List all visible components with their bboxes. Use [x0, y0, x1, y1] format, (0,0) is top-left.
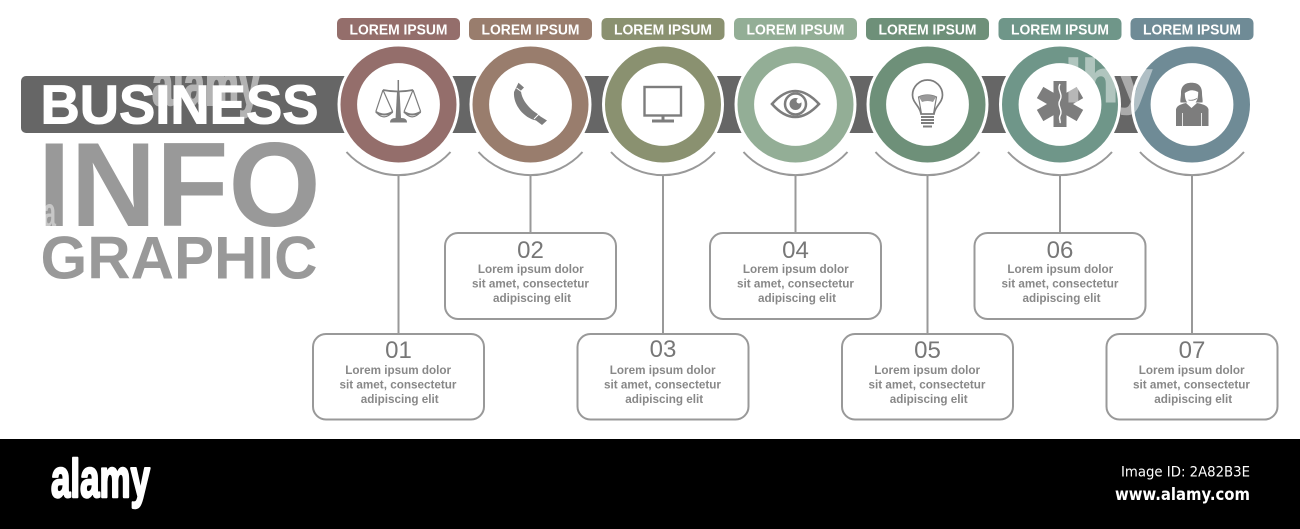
watermark fragments: a — [43, 189, 57, 237]
connector 3 — [611, 152, 715, 334]
title: BUSINESS — [40, 74, 318, 136]
icon: monitor — [644, 87, 681, 121]
step 1 — [313, 18, 484, 420]
text box 2: adipiscing elit — [493, 292, 571, 305]
connector 1 — [346, 152, 450, 334]
connector 4 — [744, 152, 848, 233]
connector 5 — [876, 152, 980, 334]
text box 6: 06 — [1047, 237, 1073, 264]
text box 5: Lorem ipsum dolor — [874, 364, 981, 377]
text box 2 — [445, 233, 616, 319]
text box 4: Lorem ipsum dolor — [743, 263, 849, 276]
label pill 7 — [1130, 18, 1254, 40]
text box 7 — [1106, 334, 1278, 420]
text box 6: adipiscing elit — [1023, 292, 1101, 305]
connector 6 — [1008, 152, 1112, 233]
label pill 6: LOREM IPSUM — [1011, 22, 1109, 38]
image id: Image ID: 2A82B3E — [1121, 464, 1250, 480]
ring 1 — [338, 44, 460, 166]
ring 3 — [602, 44, 724, 166]
icon: person with headset — [1176, 83, 1208, 126]
watermark fragments: lhy — [1065, 48, 1153, 115]
text box 1: 01 — [385, 337, 412, 364]
text box 1: adipiscing elit — [361, 393, 439, 406]
label pill 3 — [602, 18, 724, 40]
label pill 1: LOREM IPSUM — [350, 22, 448, 38]
label pill 2: LOREM IPSUM — [482, 22, 580, 38]
label pill 4 — [734, 18, 857, 40]
text box 3: adipiscing elit — [625, 393, 703, 406]
text box 7: sit amet, consectetur — [1133, 379, 1250, 392]
text box 5 — [842, 334, 1013, 420]
connector 7 — [1140, 152, 1244, 334]
icon: phone — [514, 83, 547, 125]
label pill 2 — [469, 18, 592, 40]
text box 6: sit amet, consectetur — [1002, 278, 1119, 291]
label pill 1 — [337, 18, 460, 40]
icon: scales — [376, 80, 421, 122]
step 3 — [578, 18, 748, 420]
watermark fragments — [43, 48, 1153, 237]
label pill 5 — [866, 18, 989, 40]
label pill 4: LOREM IPSUM — [746, 22, 844, 38]
step 6 — [974, 18, 1146, 319]
label pill 6 — [998, 18, 1122, 40]
text box 4: adipiscing elit — [758, 292, 836, 305]
connector 2 — [478, 152, 582, 233]
text box 1 — [313, 334, 484, 420]
text box 3 — [578, 334, 748, 420]
title — [38, 74, 321, 291]
horizontal dark band — [21, 76, 1151, 133]
text box 5: sit amet, consectetur — [869, 379, 986, 392]
ring 6 — [999, 44, 1121, 166]
text box 7: 07 — [1179, 337, 1205, 364]
text box 6 — [974, 233, 1146, 319]
icon: star of life — [1037, 81, 1083, 127]
ring 5 — [866, 44, 988, 166]
text box 6: Lorem ipsum dolor — [1007, 263, 1114, 276]
icon: eye — [772, 91, 819, 117]
label pill 3: LOREM IPSUM — [614, 22, 712, 38]
text box 5: 05 — [914, 337, 941, 364]
text box 1: Lorem ipsum dolor — [345, 364, 452, 377]
icon: light bulb — [912, 80, 942, 126]
text box 3: Lorem ipsum dolor — [610, 364, 716, 377]
text box 2: sit amet, consectetur — [472, 278, 589, 291]
watermark fragment behind title: alamy — [152, 51, 260, 118]
label pill 7: LOREM IPSUM — [1143, 22, 1241, 38]
text box 2: 02 — [517, 237, 544, 264]
label pill 5: LOREM IPSUM — [878, 22, 976, 38]
text box 4: sit amet, consectetur — [737, 278, 854, 291]
text box 3: sit amet, consectetur — [604, 379, 721, 392]
text box 1: sit amet, consectetur — [340, 379, 457, 392]
title: INFO — [38, 118, 321, 252]
step 5 — [842, 18, 1013, 420]
step 7 — [1106, 18, 1278, 420]
text box 5: adipiscing elit — [890, 393, 968, 406]
step 2 — [445, 18, 616, 319]
title: GRAPHIC — [40, 224, 318, 292]
ring 4 — [734, 44, 856, 166]
text box 7: Lorem ipsum dolor — [1139, 364, 1245, 377]
website: www.alamy.com — [1115, 485, 1250, 505]
text box 4: 04 — [782, 237, 809, 264]
text box 3: 03 — [650, 336, 676, 363]
footer bar — [0, 439, 1300, 529]
step 4 — [710, 18, 881, 319]
footer logo: alamy — [51, 449, 150, 509]
ring 2 — [470, 44, 592, 166]
ring 7 — [1131, 44, 1253, 166]
text box 7: adipiscing elit — [1154, 393, 1232, 406]
text box 4 — [710, 233, 881, 319]
text box 2: Lorem ipsum dolor — [478, 263, 584, 276]
